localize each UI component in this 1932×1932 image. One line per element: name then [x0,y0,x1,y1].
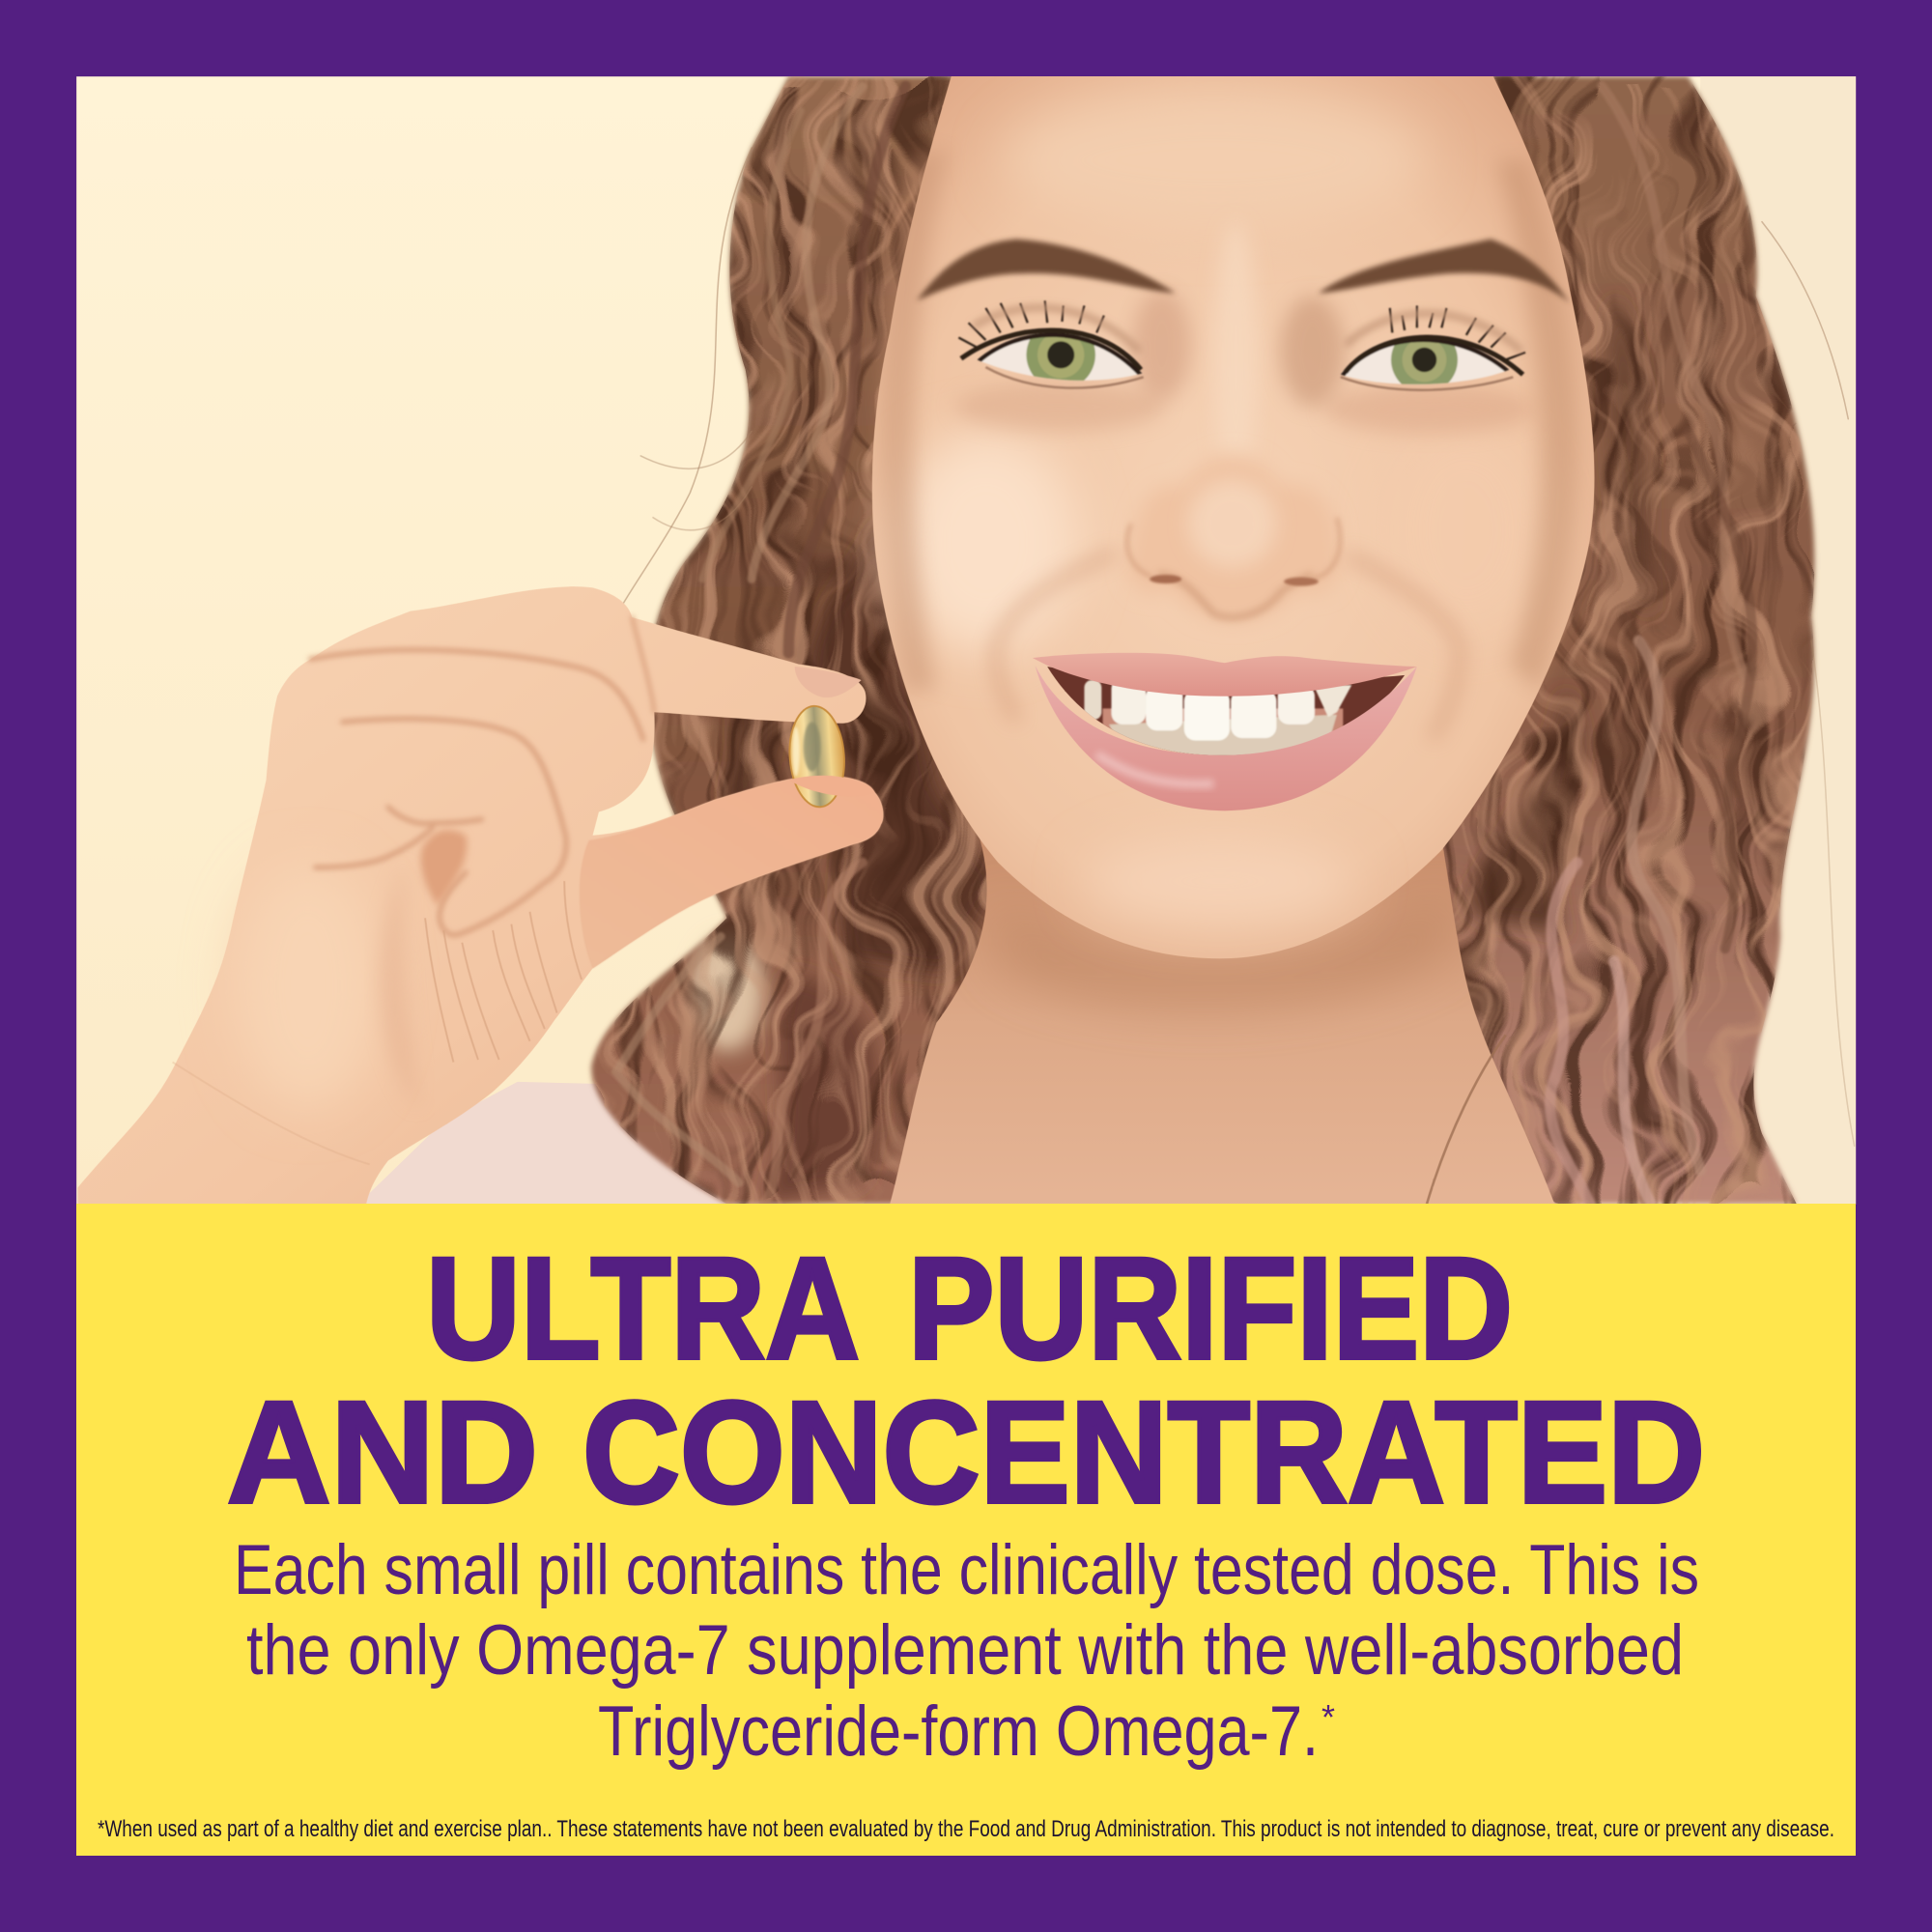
heading [227,1227,1705,1533]
body text [234,1531,1699,1771]
necklace [1427,1035,1506,1204]
nose [1126,454,1340,622]
neck [890,838,1555,1205]
heading: AND [227,1371,538,1533]
body text: Triglyceride-form Omega-7. [598,1692,1319,1771]
face [872,76,1595,958]
palm shadow [381,863,419,1109]
right backdrop tint [1700,76,1857,1205]
heading: ULTRA [426,1227,860,1389]
background showing through left hair [690,933,764,1051]
yellow text panel [76,1204,1856,1856]
softgel capsule [786,704,847,809]
index fingertip nail [795,667,862,697]
hand [77,586,883,1205]
upper lip [1033,653,1417,696]
right eyebrow [1319,239,1570,303]
body text: * [1321,1697,1335,1737]
facial shading [880,93,1578,924]
palm creases [173,881,582,1164]
body text: the only Omega-7 supplement with the well-absorbed [246,1611,1684,1690]
mouth interior [1047,667,1405,755]
smile lines [996,552,1460,739]
face skin [872,76,1595,958]
left eye [958,300,1144,389]
heading: PURIFIED [908,1227,1513,1389]
left hair mass [587,76,987,1204]
right eye [1341,305,1525,393]
hand soft shading [234,863,382,1109]
photo backdrop [76,76,1856,1205]
finger over capsule [788,776,875,796]
lip highlight [1096,754,1213,784]
mouth [1033,653,1417,810]
thumb [580,776,883,969]
photo: woman holding a softgel capsule [76,76,1857,1205]
neck shadow under chin [1004,918,1466,1016]
lower lip [1035,666,1417,810]
teeth [1084,678,1351,757]
heading: CONCENTRATED [582,1371,1705,1533]
finger contours [310,617,654,935]
knuckle pocket [421,830,467,905]
hand silhouette [77,586,883,1205]
right hair mass [1405,76,1855,1204]
sweater [357,1082,1589,1205]
left eyebrow [917,239,1176,300]
